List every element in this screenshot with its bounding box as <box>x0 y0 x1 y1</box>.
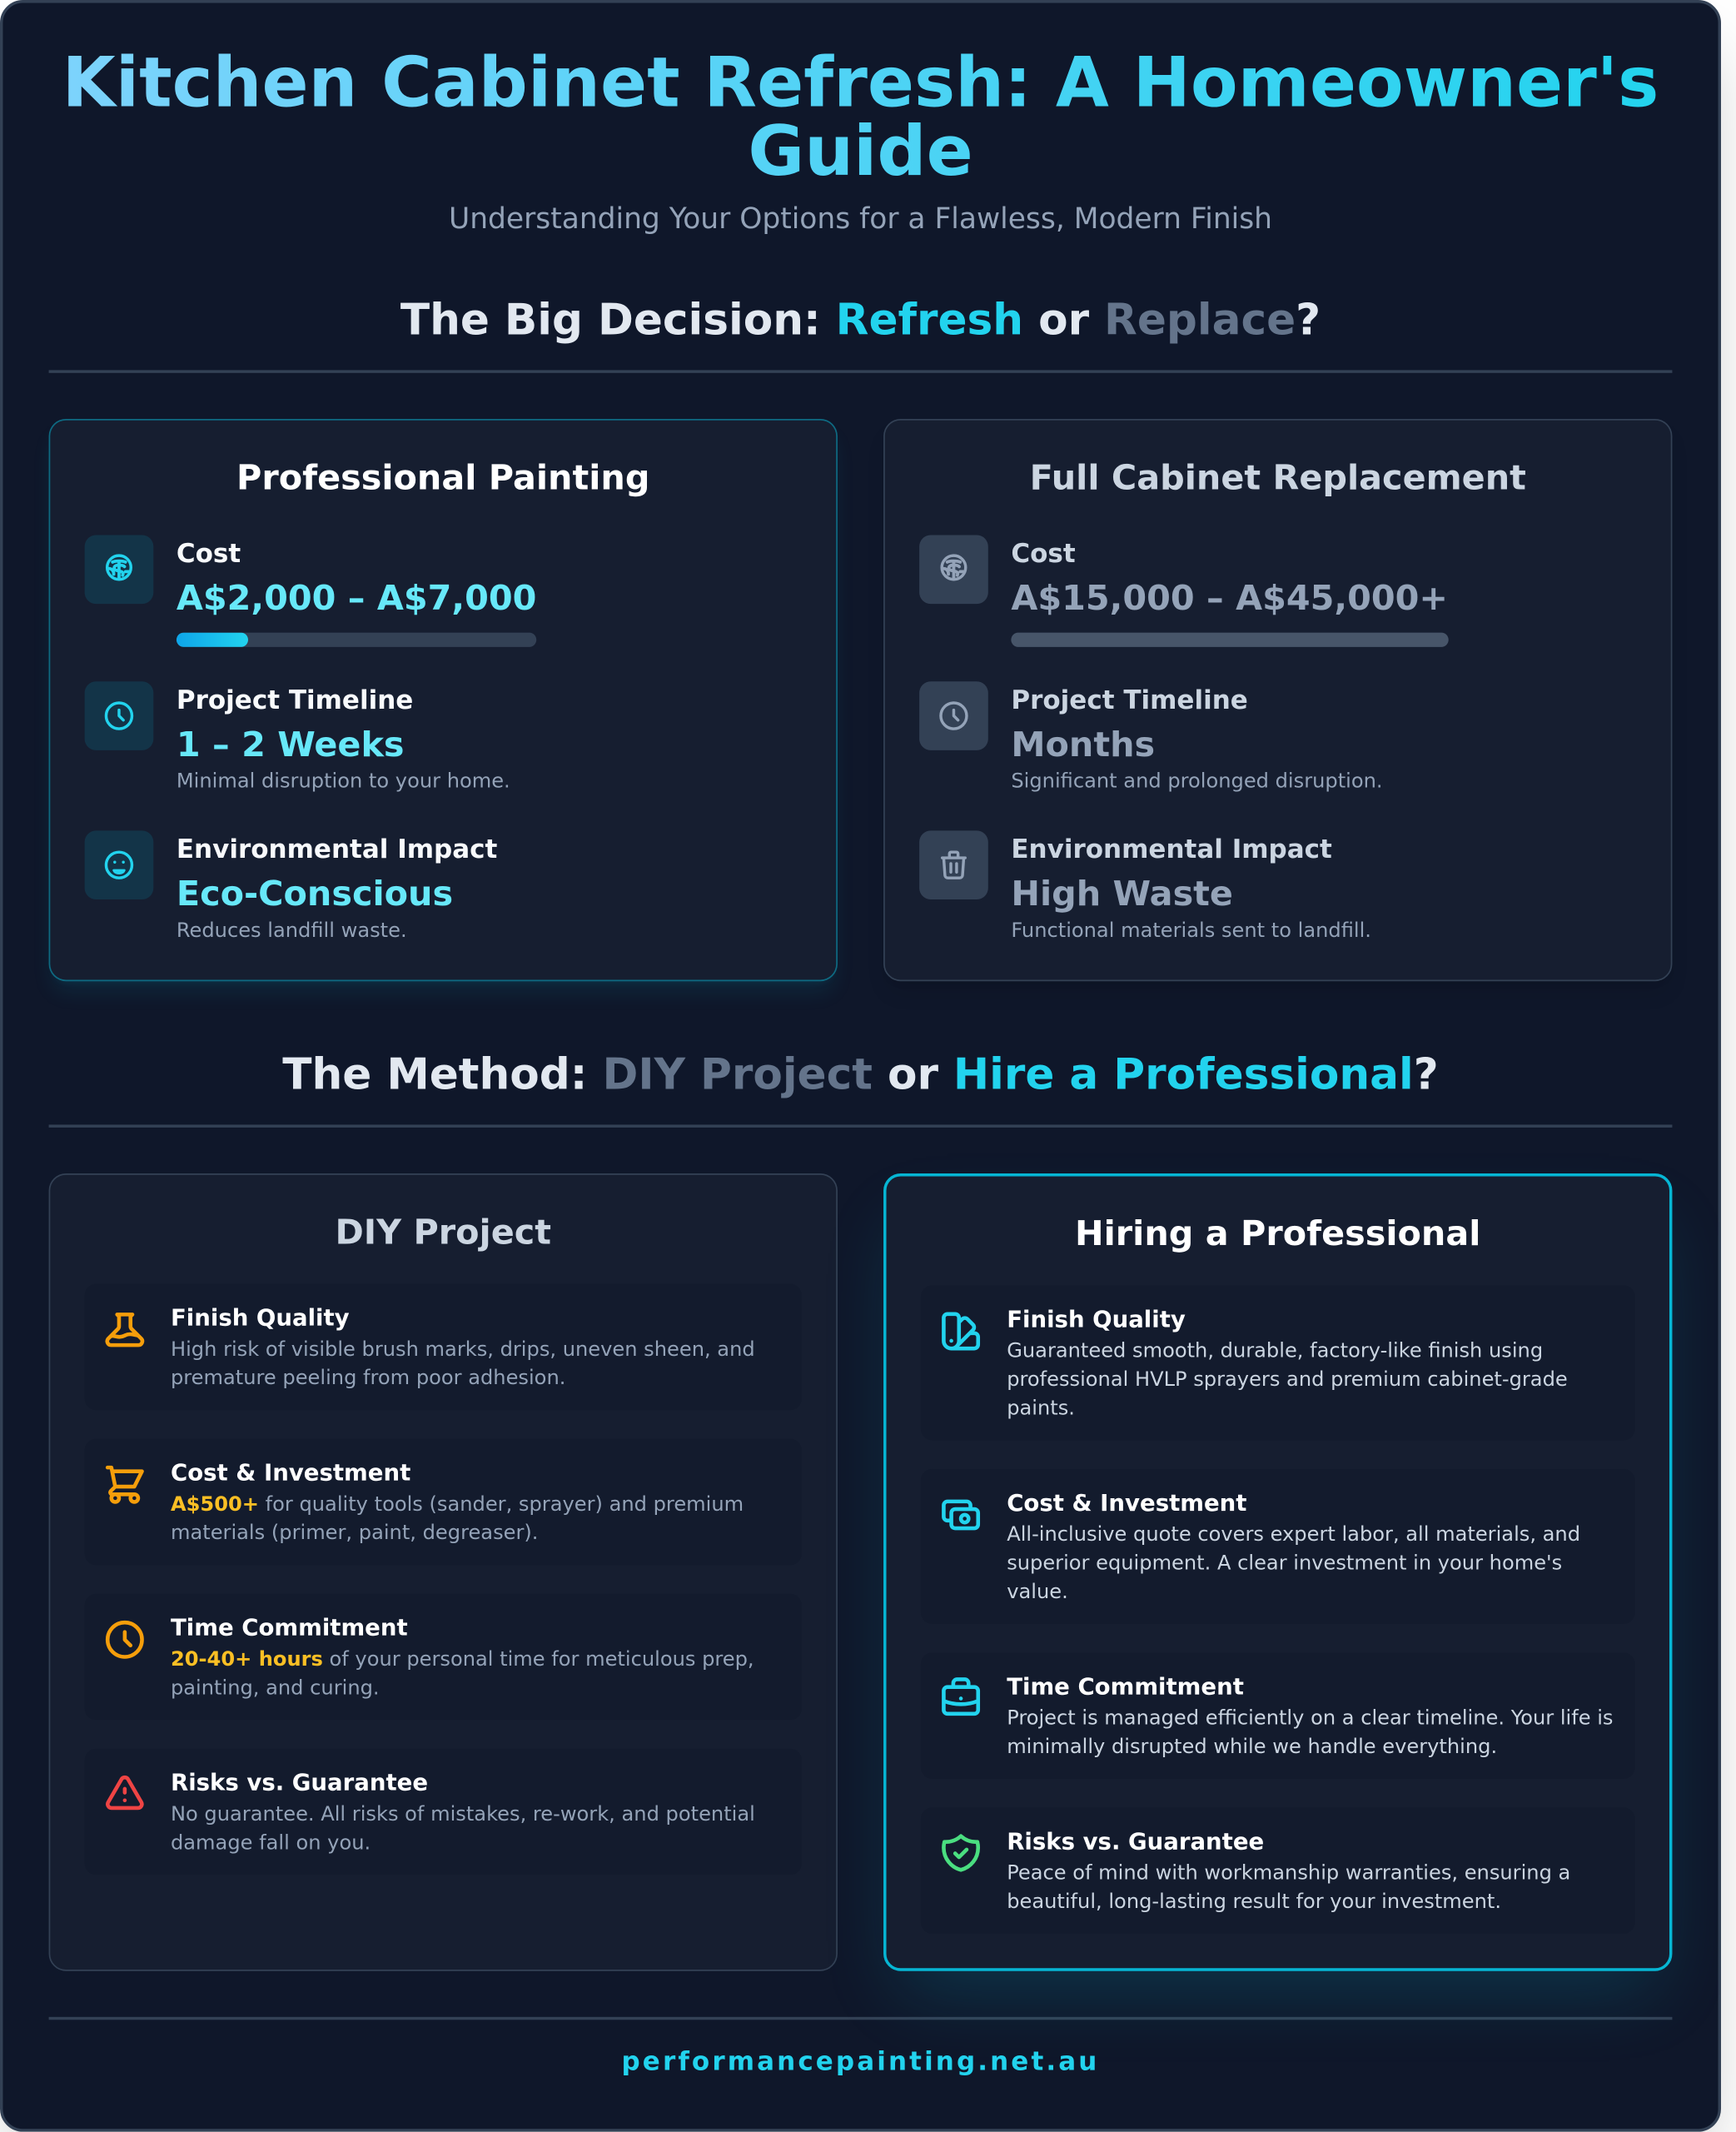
note: Significant and prolonged disruption. <box>1011 770 1383 794</box>
value: Months <box>1011 725 1155 765</box>
comparison: refresh vs replace <box>48 419 1672 990</box>
icon: smile <box>85 830 153 899</box>
timeline text <box>1011 685 1383 794</box>
DIY list <box>105 1304 755 1855</box>
item description: A$500+ for quality tools (sander, sprayer) and premium materials (primer, paint, degreaser). <box>171 1493 744 1545</box>
icon: swatch <box>942 1313 981 1351</box>
value: 1 – 2 Weeks <box>177 725 405 765</box>
footer: website <box>49 2017 1672 2083</box>
value: Eco-Conscious <box>177 874 453 914</box>
panel: hiring a professional <box>883 1173 1672 1971</box>
metric: cost <box>919 535 1449 647</box>
item description: Project is managed efficiently on a clear timeline. Your life is minimally disrupted while we handle everything. <box>1007 1707 1614 1759</box>
comparison: DIY vs professional <box>48 1173 1677 2010</box>
panel heading: Full Cabinet Replacement <box>1030 457 1526 498</box>
icon: warning <box>106 1776 144 1811</box>
metric: timeline <box>85 681 510 794</box>
item description: High risk of visible brush marks, drips, uneven sheen, and premature peeling from poor adhesion. <box>171 1338 755 1390</box>
icon: briefcase <box>942 1677 981 1716</box>
item: time <box>921 1652 1635 1779</box>
label: Environmental Impact <box>1011 834 1332 865</box>
value: High Waste <box>1011 874 1233 914</box>
item text <box>171 1304 755 1390</box>
item text <box>1007 1305 1568 1420</box>
icon: clock <box>85 681 153 750</box>
item description: 20-40+ hours of your personal time for meticulous prep, painting, and curing. <box>171 1648 754 1700</box>
icon: clock <box>105 1621 144 1659</box>
panel: professional painting <box>49 419 838 981</box>
label: Environmental Impact <box>177 834 497 865</box>
item title: Time Commitment <box>171 1614 408 1641</box>
metric: cost <box>85 535 536 647</box>
item text <box>1007 1489 1580 1604</box>
title: Kitchen Cabinet Refresh: A Homeowner's Guide <box>62 43 1659 192</box>
professional list <box>942 1305 1614 1914</box>
cost bar <box>1011 633 1448 647</box>
icon: cash <box>942 1499 981 1531</box>
heading: DIY or professional: The Method: DIY Project or Hire a Professional? <box>282 1050 1439 1100</box>
item title: Risks vs. Guarantee <box>171 1769 428 1796</box>
value: A$15,000 – A$45,000+ <box>1011 578 1448 618</box>
item text <box>171 1459 744 1545</box>
item: finish quality <box>85 1284 802 1410</box>
heading: refresh or replace: The Big Decision: Refresh or Replace? <box>400 296 1321 346</box>
item title: Finish Quality <box>171 1304 350 1331</box>
item title: Cost & Investment <box>171 1459 410 1487</box>
item description: No guarantee. All risks of mistakes, re-work, and potential damage fall on you. <box>171 1803 755 1855</box>
metric list <box>85 535 536 943</box>
cost text <box>1011 540 1449 647</box>
item title: Cost & Investment <box>1007 1489 1246 1517</box>
item text <box>1007 1672 1614 1759</box>
item: risks <box>85 1749 802 1875</box>
item: risks <box>921 1807 1635 1934</box>
label: Cost <box>1011 540 1076 570</box>
footer: website: performancepainting.net.au <box>622 2047 1099 2077</box>
item description: Guaranteed smooth, durable, factory-like finish using professional HVLP sprayers and premium cabinet-grade paints. <box>1007 1340 1568 1420</box>
item description: Peace of mind with workmanship warranties, ensuring a beautiful, long-lasting result for your investment. <box>1007 1862 1570 1914</box>
panel heading: Professional Painting <box>236 457 649 498</box>
item: finish quality <box>921 1285 1635 1440</box>
icon: trash <box>919 830 988 899</box>
header <box>62 43 1659 235</box>
cost bar <box>177 633 536 647</box>
environment text <box>1011 834 1371 943</box>
icon: flask <box>105 1313 145 1347</box>
item title: Time Commitment <box>1007 1672 1244 1700</box>
item text <box>1007 1827 1570 1914</box>
item: time <box>85 1594 802 1720</box>
subtitle: Understanding Your Options for a Flawless, Modern Finish <box>449 201 1272 235</box>
icon: cart <box>105 1466 144 1504</box>
item title: Risks vs. Guarantee <box>1007 1827 1264 1855</box>
icon: shield check <box>942 1834 981 1872</box>
label: Cost <box>177 540 241 570</box>
panel heading: Hiring a Professional <box>1075 1213 1480 1253</box>
heading: refresh or replace <box>49 296 1672 373</box>
note: Minimal disruption to your home. <box>177 770 510 794</box>
value: A$2,000 – A$7,000 <box>177 578 536 618</box>
metric: environment <box>919 830 1371 943</box>
item description: All-inclusive quote covers expert labor, all materials, and superior equipment. A clear investment in your home's value. <box>1007 1523 1580 1604</box>
icon: clock <box>919 681 988 750</box>
label: Project Timeline <box>1011 685 1248 716</box>
item text <box>171 1769 755 1855</box>
icon: currency <box>85 535 153 604</box>
metric: timeline <box>919 681 1383 794</box>
note: Reduces landfill waste. <box>177 919 407 943</box>
label: Project Timeline <box>177 685 413 716</box>
timeline text <box>177 685 510 794</box>
metric list <box>919 535 1449 943</box>
item text <box>171 1614 754 1700</box>
cost text <box>177 540 536 647</box>
environment text <box>177 834 497 943</box>
item: cost <box>85 1439 802 1565</box>
panel: DIY project <box>49 1173 838 1971</box>
item title: Finish Quality <box>1007 1305 1186 1332</box>
heading: DIY or professional <box>49 1050 1672 1128</box>
item: cost <box>921 1469 1635 1624</box>
note: Functional materials sent to landfill. <box>1011 919 1371 943</box>
panel heading: DIY Project <box>335 1213 551 1253</box>
metric: environment <box>85 831 497 943</box>
icon: currency <box>919 535 988 604</box>
panel: full cabinet replacement <box>883 419 1672 981</box>
